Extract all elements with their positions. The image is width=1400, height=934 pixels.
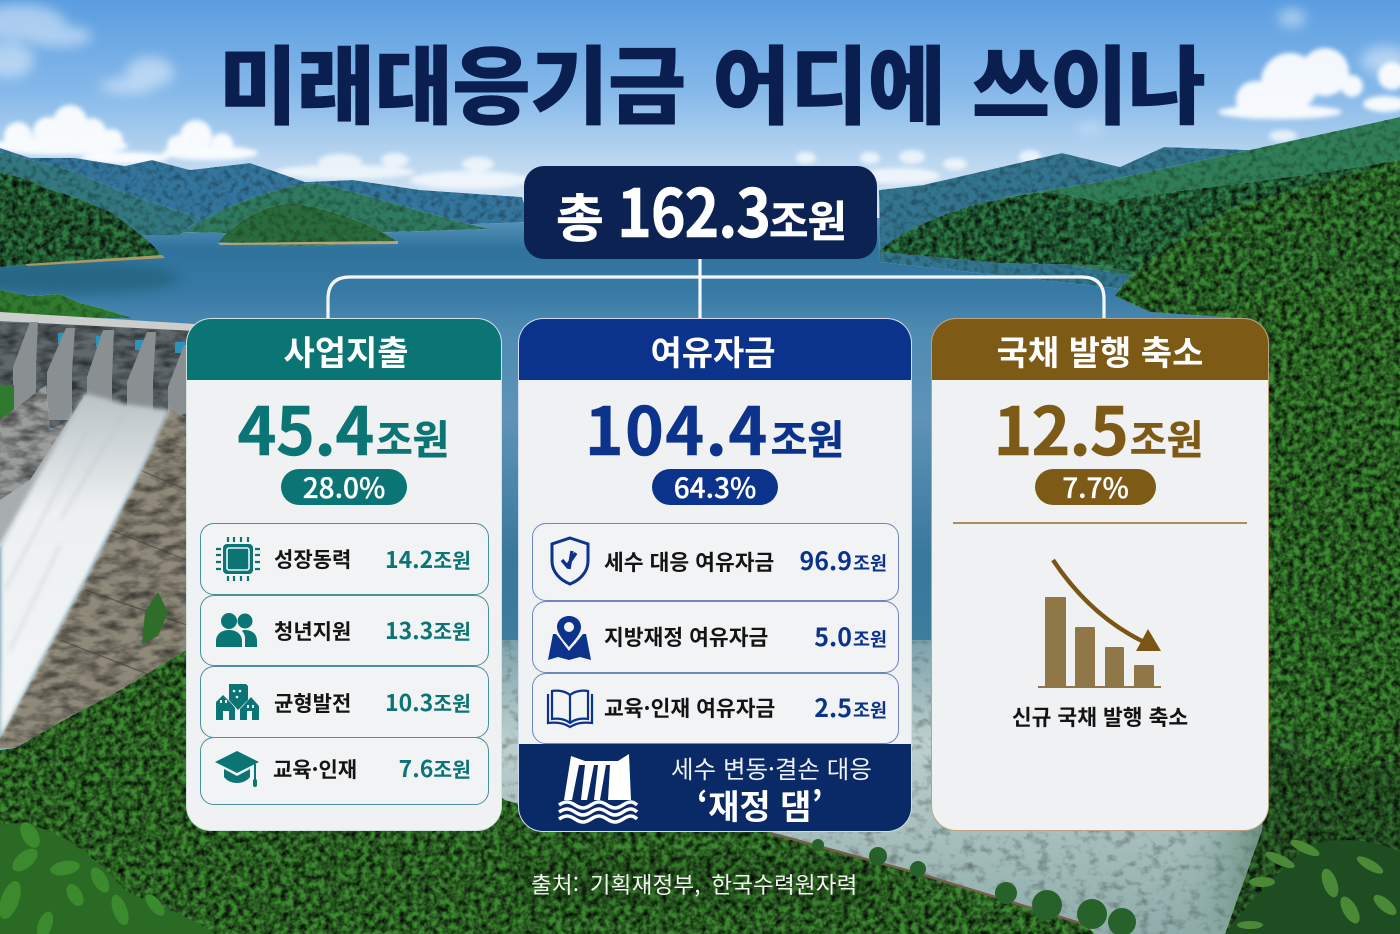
panel heading: 여유자금: [650, 326, 776, 375]
value: 13.3조원: [385, 612, 471, 646]
total amount: 총: [556, 177, 604, 252]
total amount: 조원: [769, 188, 846, 250]
rock wall: [0, 408, 190, 748]
item: 성장동력: [200, 523, 489, 595]
chart caption: 신규 국채 발행 축소: [1012, 701, 1188, 732]
bottom forest: [0, 620, 1095, 934]
chart: declining bars: [1038, 558, 1161, 688]
divider: [953, 522, 1247, 524]
amount: 45.4조원: [238, 379, 449, 475]
dam body: [0, 322, 190, 440]
icon: people: [216, 613, 257, 647]
shadow of left hill on the lake: [0, 262, 180, 294]
item: 청년지원: [200, 595, 489, 666]
trees behind dam: [0, 290, 132, 318]
value: 5.0조원: [814, 618, 887, 654]
label: 지방재정 여유자금: [604, 621, 768, 652]
share pill: 28.0%: [303, 467, 385, 507]
dark band behind source note: [515, 862, 875, 904]
far mountains left: [0, 148, 530, 232]
railing and trees along the shore: [770, 833, 1083, 924]
icon: dam: [558, 754, 638, 824]
arrow: [1053, 560, 1161, 651]
item: 교육·인재 여유자금: [532, 673, 899, 744]
item: 교육·인재: [200, 737, 489, 805]
callout line 2: ‘재정 댐’: [697, 780, 823, 829]
item: 균형발전: [200, 666, 489, 738]
total amount: [556, 161, 846, 257]
icon: chip: [216, 537, 260, 581]
label: 성장동력: [274, 544, 351, 574]
title: 미래대응기금 어디에 쓰이나: [219, 19, 1205, 142]
panel heading: 국채 발행 축소: [997, 326, 1203, 375]
share pill: 7.7%: [1062, 467, 1129, 507]
value: 7.6조원: [399, 750, 471, 784]
panel heading: [519, 319, 911, 380]
label: 균형발전: [274, 688, 351, 718]
callout banner: 재정 댐: [519, 744, 911, 831]
share pill: 64.3%: [674, 467, 756, 507]
amount: 12.5조원: [994, 379, 1203, 475]
callout line 1: 세수 변동·결손 대응: [671, 751, 872, 786]
label: 청년지원: [274, 616, 351, 646]
icon: buildings: [216, 684, 259, 720]
panel heading: 사업지출: [283, 326, 409, 375]
share pill: [1035, 469, 1156, 505]
total amount: 162.3: [617, 161, 770, 257]
label: 교육·인재: [273, 754, 357, 784]
concrete apron: [0, 385, 70, 500]
icon: map pin: [548, 616, 591, 660]
panel: 여유자금: [519, 319, 911, 831]
share pill: [281, 469, 407, 505]
far mountains right: [879, 117, 1400, 320]
panel heading: [932, 319, 1268, 380]
foam: [501, 640, 1268, 934]
value: 14.2조원: [385, 541, 471, 575]
icon: graduation cap: [215, 751, 259, 787]
icon: shield: [550, 536, 590, 586]
value: 10.3조원: [385, 684, 471, 718]
panel heading: [187, 319, 501, 380]
value: 96.9조원: [800, 542, 887, 578]
foliage foreground: [0, 823, 215, 934]
label: 교육·인재 여유자금: [604, 692, 775, 723]
item: 지방재정 여유자금: [532, 601, 899, 673]
islands: [183, 183, 489, 235]
spillway water: [0, 393, 170, 738]
item: 세수 대응 여유자금: [532, 523, 899, 601]
total amount box: [524, 166, 877, 259]
share pill: [652, 469, 778, 505]
panel: 사업지출: [187, 319, 501, 830]
source note: 출처: 기획재정부, 한국수력원자력: [531, 868, 858, 900]
value: 2.5조원: [814, 689, 887, 725]
label: 세수 대응 여유자금: [604, 546, 774, 577]
icon: open book: [546, 690, 594, 728]
amount: 104.4조원: [585, 379, 844, 475]
panel: 국채 발행 축소: [932, 319, 1268, 830]
